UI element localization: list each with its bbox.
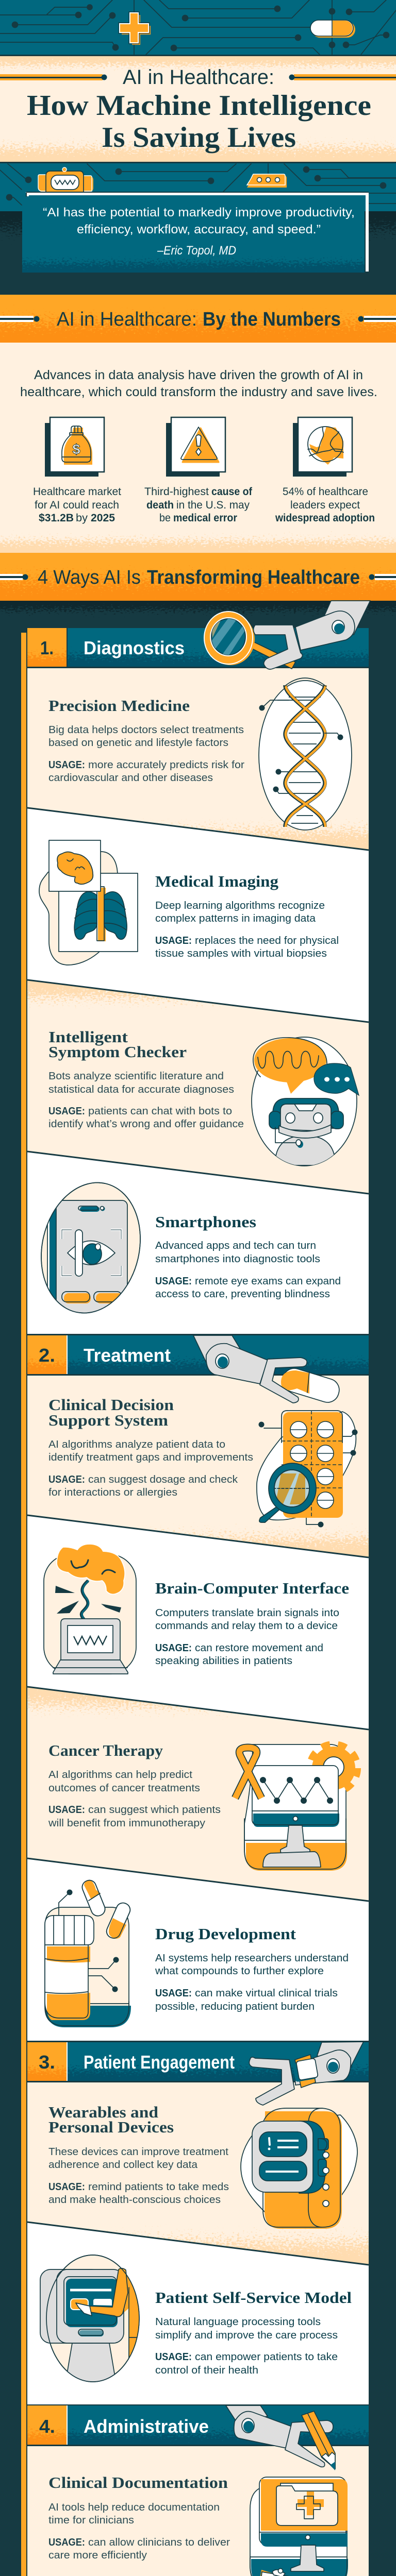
- card: Smartphones: access to care, preventing blindness: [155, 1289, 330, 1300]
- icon card: money bag: [45, 417, 104, 477]
- card: Drug Development: what compounds to further explore: [155, 1965, 324, 1977]
- panel: statistics: widespread adoption: [275, 512, 375, 524]
- card: Medical Imaging: [39, 840, 339, 965]
- section header: 3 Patient Engagement: [27, 2041, 369, 2105]
- card: Smartphones: [41, 1182, 340, 1314]
- card: Clinical Decision Support System: for interactions or allergies: [48, 1487, 177, 1498]
- icon: robot arm with magnifier: [204, 601, 370, 669]
- panel: top circuit header: [0, 0, 396, 55]
- card: Medical Imaging: Medical Imaging: [155, 872, 279, 890]
- section header: 1 Diagnostics: [27, 601, 370, 669]
- section header: 4 Administrative: Administrative: [84, 2416, 209, 2437]
- callout: quote: efficiency, workflow, accuracy, and speed.”: [77, 223, 321, 236]
- panel: statistics: death: [146, 499, 174, 511]
- card: Drug Development: [45, 1878, 349, 2027]
- icon: capsule: [310, 20, 355, 38]
- card: Wearables and Personal Devices: remind patients to take meds: [88, 2181, 229, 2193]
- panel: statistics: 2025: [91, 512, 115, 524]
- card: Brain-Computer Interface: commands and relay them to a device: [155, 1620, 338, 1632]
- card: Intelligent Symptom Checker: identify what’s wrong and offer guidance: [48, 1118, 244, 1130]
- panel: statistics: in the U.S. may: [176, 499, 250, 511]
- section header: 3 Patient Engagement: 3.: [39, 2052, 55, 2073]
- card: Clinical Documentation: AI tools help reduce documentation: [48, 2502, 220, 2513]
- icon card: globe: [293, 417, 352, 477]
- icon: monitor, gear and ribbon: [235, 1744, 358, 1871]
- card: Cancer Therapy: Cancer Therapy: [48, 1741, 163, 1759]
- title line 1: AI in Healthcare:: [123, 66, 274, 89]
- panel: statistics: $31.2B: [39, 512, 74, 524]
- icon: blister pack: [257, 1411, 358, 1527]
- card: Smartphones: smartphones into diagnostic tools: [155, 1253, 320, 1265]
- lower circuit background: [0, 163, 396, 211]
- card: Cancer Therapy: USAGE:: [48, 1804, 85, 1816]
- heading: Precision Medicine: [48, 697, 190, 715]
- card: Medical Imaging: replaces the need for physical: [195, 935, 339, 946]
- section header: 4 Administrative: [27, 2404, 369, 2470]
- card: Brain-Computer Interface: [44, 1544, 349, 1674]
- card: Medical Imaging: complex patterns in imaging data: [155, 913, 316, 924]
- card: Patient Self-Service Model: Patient Self-Service Model: [155, 2289, 352, 2307]
- card: Intelligent Symptom Checker: USAGE:: [48, 1106, 85, 1117]
- icon: smartwatch: [241, 2108, 357, 2229]
- icon card: warning: [166, 417, 225, 477]
- dark grain: [0, 601, 396, 619]
- usage: USAGE:: [48, 759, 85, 771]
- card: Intelligent Symptom Checker: patients can chat with bots to: [88, 1106, 232, 1117]
- card: Patient Self-Service Model: simplify and improve the care process: [155, 2330, 338, 2341]
- card: Patient Self-Service Model: can empower patients to take: [195, 2351, 338, 2363]
- section header: 2 Treatment: [27, 1334, 369, 1405]
- section header: 1 Diagnostics: Diagnostics: [84, 637, 185, 658]
- card: Brain-Computer Interface: Brain-Computer Interface: [155, 1579, 349, 1597]
- card: Cancer Therapy: will benefit from immunotherapy: [48, 1818, 205, 1829]
- card: Medical Imaging: USAGE:: [155, 935, 192, 946]
- icon: speech bubble: [247, 174, 287, 188]
- panel: statistics: cause of: [211, 486, 253, 498]
- card: Patient Self-Service Model: Natural language processing tools: [155, 2316, 321, 2328]
- card: Clinical Documentation: time for clinicians: [48, 2515, 134, 2526]
- card: Brain-Computer Interface: USAGE:: [155, 1642, 192, 1654]
- robot head: [273, 1098, 339, 1128]
- icon: smartphone eye scan: [41, 1182, 141, 1314]
- dark background grain: [0, 211, 396, 247]
- description: Big data helps doctors select treatments: [48, 724, 244, 736]
- callout: quote: [22, 192, 369, 273]
- icon: medical cross: [119, 12, 151, 45]
- icon: robot arm with pill: [193, 1335, 342, 1405]
- card: Clinical Decision Support System: USAGE:: [48, 1474, 85, 1485]
- card: Drug Development: USAGE:: [155, 1988, 192, 1999]
- card: Medical Imaging: Deep learning algorithms recognize: [155, 900, 325, 911]
- card: Clinical Documentation: can allow clinicians to deliver: [88, 2537, 230, 2548]
- section header: 1 Diagnostics: 1.: [40, 637, 54, 658]
- icon: chatbot: [252, 1037, 359, 1166]
- icon: lungs scan: [39, 840, 138, 965]
- panel: statistics: medical error: [173, 512, 237, 524]
- card: Brain-Computer Interface: can restore movement and: [195, 1642, 323, 1654]
- section backgrounds: [27, 668, 369, 2576]
- card: Clinical Decision Support System: Clinical Decision: [48, 1396, 174, 1414]
- circuit traces: [0, 0, 396, 55]
- card: Clinical Documentation: USAGE:: [48, 2537, 85, 2548]
- card: Precision Medicine: cardiovascular and other diseases: [48, 772, 213, 784]
- card: Clinical Decision Support System: identify treatment gaps and improvements: [48, 1452, 253, 1463]
- title rule right: [289, 74, 396, 80]
- title line 2: How Machine Intelligence: [27, 90, 371, 122]
- card: Clinical Decision Support System: can suggest dosage and check: [88, 1474, 238, 1485]
- card: Clinical Documentation: Clinical Documentation: [48, 2473, 228, 2492]
- card: Drug Development: Drug Development: [155, 1925, 296, 1943]
- card: Wearables and Personal Devices: Personal Devices: [48, 2118, 174, 2136]
- card: Cancer Therapy: [48, 1741, 358, 1871]
- card: Drug Development: possible, reducing patient burden: [155, 2001, 315, 2012]
- panel: statistics: healthcare, which could transform the industry and save lives.: [20, 385, 377, 399]
- card: Cancer Therapy: AI algorithms can help predict: [48, 1769, 192, 1781]
- title line 3: Is Saving Lives: [102, 122, 296, 154]
- card: Patient Self-Service Model: control of their health: [155, 2365, 258, 2376]
- icon: brain and laptop: [44, 1544, 136, 1674]
- panel: 4 ways heading: Transforming Healthcare: [147, 567, 360, 588]
- card: Wearables and Personal Devices: These devices can improve treatment: [48, 2146, 228, 2158]
- card: Drug Development: can make virtual clinical trials: [195, 1988, 338, 1999]
- orange side frame: [21, 633, 364, 2576]
- icon card: money bag: $: [72, 442, 80, 457]
- card: Cancer Therapy: outcomes of cancer treatments: [48, 1783, 200, 1794]
- card: Clinical Documentation: care more efficiently: [48, 2550, 147, 2561]
- title rule left: [0, 74, 107, 80]
- icon: self-service kiosk: [40, 2255, 144, 2391]
- card: Intelligent Symptom Checker: statistical data for accurate diagnoses: [48, 1084, 234, 1095]
- section header: 4 Administrative: 4.: [39, 2416, 55, 2437]
- card: Intelligent Symptom Checker: [48, 1028, 359, 1166]
- card: Clinical Decision Support System: AI algorithms analyze patient data to: [48, 1439, 225, 1450]
- card: Precision Medicine: more accurately predicts risk for: [88, 759, 244, 771]
- card: Clinical Documentation: [48, 2473, 348, 2576]
- card: Clinical Decision Support System: [48, 1396, 358, 1527]
- icon: monitor with medical folder: [250, 2477, 348, 2576]
- panel: by the numbers heading: [0, 295, 396, 343]
- card: Precision Medicine: [48, 678, 352, 830]
- card: Smartphones: Smartphones: [155, 1213, 256, 1231]
- card: Brain-Computer Interface: speaking abilities in patients: [155, 1655, 292, 1667]
- panel: statistics: by: [76, 512, 88, 524]
- card: Clinical Decision Support System: Support System: [48, 1411, 168, 1429]
- panel: statistics: be: [159, 512, 171, 524]
- card: Wearables and Personal Devices: Wearables and: [48, 2103, 158, 2121]
- card: Smartphones: remote eye exams can expand: [195, 1276, 341, 1287]
- card: Intelligent Symptom Checker: Intelligent: [48, 1028, 128, 1046]
- card: Patient Self-Service Model: [40, 2255, 352, 2391]
- quote attribution: –Eric Topol, MD: [157, 244, 236, 258]
- card: Smartphones: USAGE:: [155, 1276, 192, 1287]
- icon: robot head: [38, 167, 93, 192]
- quote text: “AI has the potential to markedly improve productivity,: [43, 206, 355, 219]
- card: Smartphones: Advanced apps and tech can turn: [155, 1240, 316, 1251]
- section header: 2 Treatment: 2.: [39, 1345, 55, 1366]
- icon: robot arm with pencil: [226, 2405, 335, 2470]
- card: Patient Self-Service Model: USAGE:: [155, 2351, 192, 2363]
- panel: statistics: leaders expect: [290, 499, 360, 511]
- card: Medical Imaging: tissue samples with virtual biopsies: [155, 948, 327, 959]
- card: Brain-Computer Interface: Computers translate brain signals into: [155, 1607, 339, 1619]
- panel: by the numbers heading: By the Numbers: [203, 309, 341, 330]
- panel: 4 ways heading: 4 Ways AI Is: [38, 567, 141, 588]
- section header: 2 Treatment: Treatment: [84, 1345, 171, 1366]
- card: Intelligent Symptom Checker: Bots analyze scientific literature and: [48, 1071, 224, 1082]
- panel: statistics: for AI could reach: [35, 499, 119, 511]
- card: Wearables and Personal Devices: [48, 2103, 357, 2229]
- icon: medicine bottle and pills: [45, 1878, 133, 2027]
- card: Wearables and Personal Devices: USAGE:: [48, 2181, 85, 2193]
- section header: 3 Patient Engagement: Patient Engagement: [84, 2052, 235, 2073]
- card: Wearables and Personal Devices: adherence and collect key data: [48, 2159, 198, 2171]
- card: Drug Development: AI systems help researchers understand: [155, 1953, 349, 1964]
- panel: main content background: [27, 668, 369, 2576]
- icon: robot arm with watch: [249, 2042, 364, 2105]
- card: Intelligent Symptom Checker: Symptom Checker: [48, 1043, 187, 1061]
- stat 2 text: Third-highest: [144, 486, 209, 498]
- panel: 4 ways heading: [0, 553, 396, 601]
- card: Wearables and Personal Devices: and make health-conscious choices: [48, 2194, 221, 2206]
- card: Cancer Therapy: can suggest which patients: [88, 1804, 221, 1816]
- panel: by the numbers heading: AI in Healthcare:: [57, 309, 197, 330]
- panel: title band: [0, 55, 396, 163]
- stat 3 text: 54% of healthcare: [283, 486, 368, 498]
- icon: DNA helix: [259, 678, 352, 830]
- stat 1 text: Healthcare market: [33, 486, 121, 498]
- card: Precision Medicine: based on genetic and lifestyle factors: [48, 737, 228, 749]
- intro text: Advances in data analysis have driven the growth of AI in: [34, 368, 363, 382]
- panel: statistics: [0, 343, 396, 553]
